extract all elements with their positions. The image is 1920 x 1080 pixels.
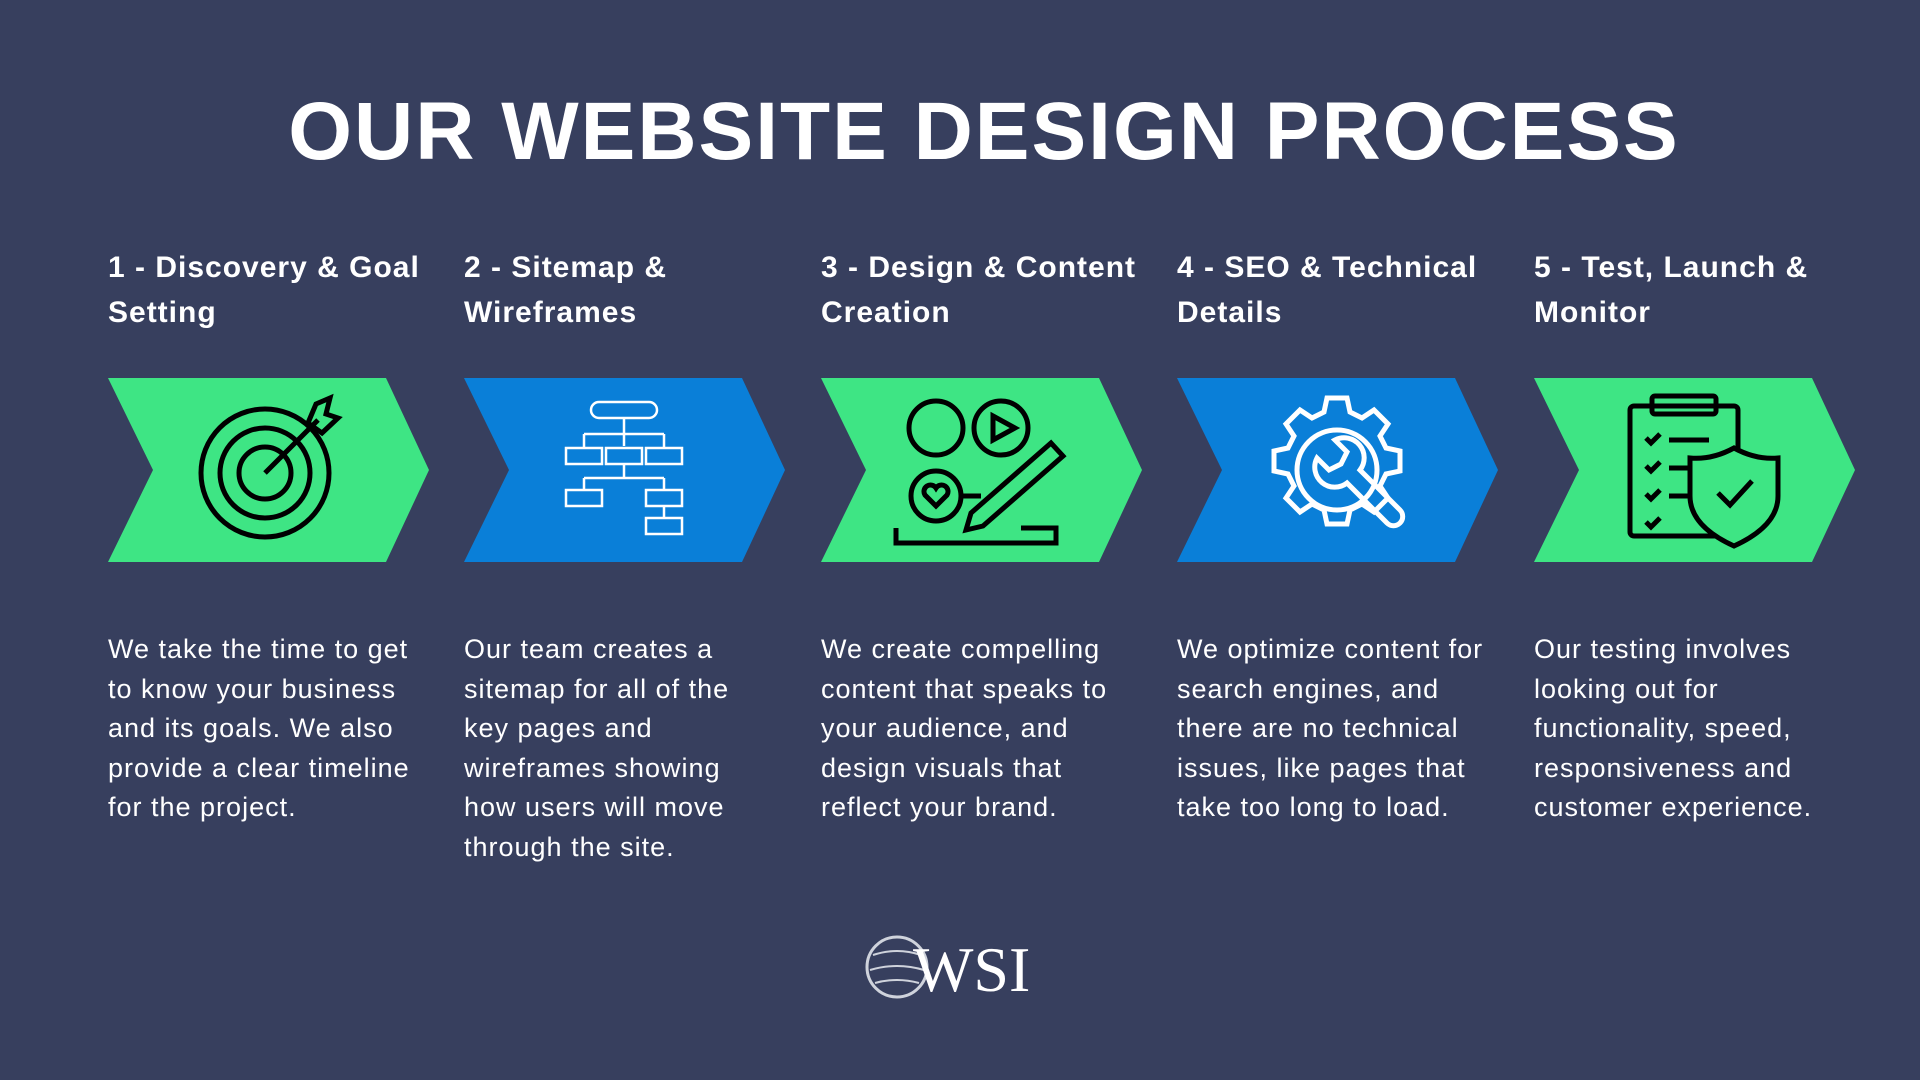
panel: step 3: [821, 251, 1142, 822]
heading 4: 4 - SEO & Technical Details: [1177, 251, 1477, 329]
chevron with sitemap icon: [464, 378, 785, 562]
text 4: We optimize content for search engines, and there are no technical issues, like pages that take too long to load.: [1177, 634, 1483, 822]
text 1: We take the time to get to know your business and its goals. We also provide a clear timeline for the project.: [108, 634, 410, 822]
chevron with design icon: [821, 378, 1142, 562]
text 2: Our team creates a sitemap for all of the key pages and wireframes showing how users will move through the site.: [464, 634, 729, 862]
heading 1: 1 - Discovery & Goal Setting: [108, 251, 420, 329]
title: OUR WEBSITE DESIGN PROCESS: [288, 86, 1680, 177]
panel: step 2: [464, 251, 785, 862]
chevron with clipboard icon: [1534, 378, 1855, 562]
heading 5: 5 - Test, Launch & Monitor: [1534, 251, 1808, 329]
text 3: We create compelling content that speaks to your audience, and design visuals that reflect your brand.: [821, 634, 1107, 822]
chevron with target icon: [108, 378, 429, 562]
logo: WSI: WSI: [913, 934, 1030, 1005]
panel: step 5: [1534, 251, 1855, 822]
panel: step 4: [1177, 251, 1498, 822]
chevron with gear icon: [1177, 378, 1498, 562]
heading 3: 3 - Design & Content Creation: [821, 251, 1136, 329]
panel: step 1: [108, 251, 429, 822]
heading 2: 2 - Sitemap & Wireframes: [464, 251, 667, 329]
text 5: Our testing involves looking out for functionality, speed, responsiveness and customer experience.: [1534, 634, 1812, 822]
